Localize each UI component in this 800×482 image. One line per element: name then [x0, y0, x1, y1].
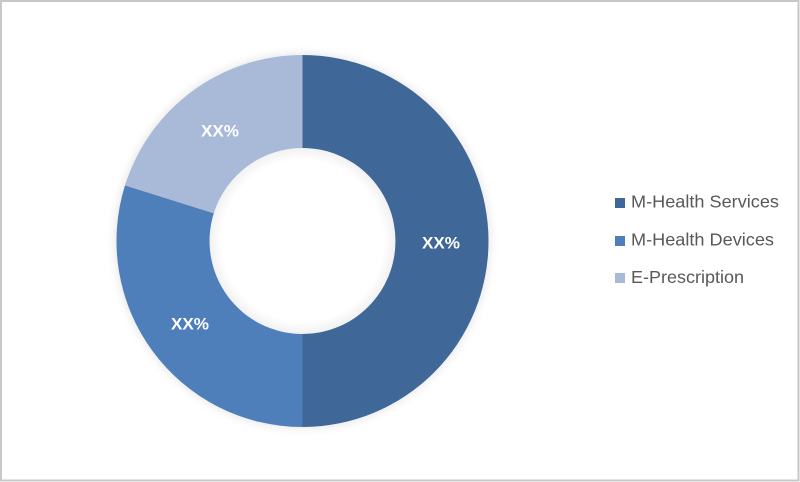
donut chart	[116, 55, 489, 427]
value label: M-Health Services: XX%	[422, 234, 460, 252]
segment: M-Health Services	[302, 55, 489, 427]
value label: E-Prescription: XX%	[201, 122, 239, 140]
legend item: E-Prescription: E-Prescription	[631, 267, 744, 287]
legend item: M-Health Services: M-Health Services	[631, 192, 779, 212]
legend item: M-Health Devices: M-Health Devices	[631, 230, 774, 250]
segment: E-Prescription	[125, 55, 302, 213]
segment: M-Health Devices	[116, 185, 303, 427]
value label: M-Health Devices: XX%	[171, 316, 209, 334]
legend	[615, 192, 779, 287]
